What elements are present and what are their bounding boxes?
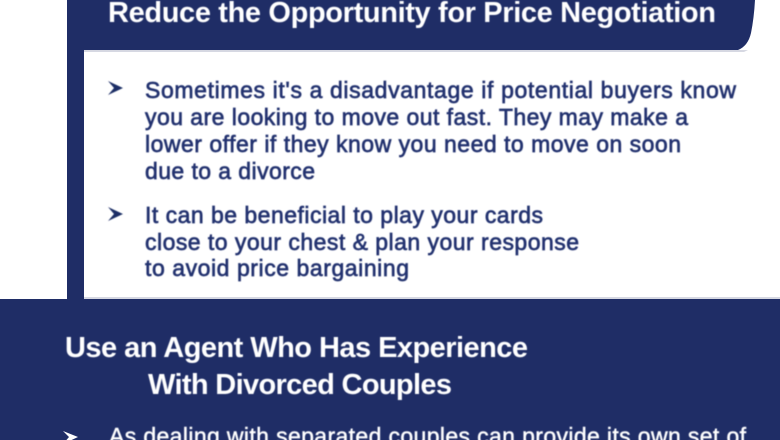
panel: price negotiation section [67, 0, 780, 299]
heading: experienced agent: With Divorced Couples [148, 369, 452, 401]
icon: arrow bullet two [108, 207, 123, 221]
icon: arrow bullet three [63, 431, 78, 440]
bullet text one: you are looking to move out fast. They may make a [145, 104, 688, 130]
bullet text one: lower offer if they know you need to move on soon [145, 131, 681, 157]
heading banner [67, 0, 755, 299]
panel: price negotiation bullet points [108, 77, 736, 281]
bullet text one: Sometimes it's a disadvantage if potential buyers know [145, 77, 736, 103]
bullet text two: It can be beneficial to play your cards [145, 202, 543, 228]
bullet text two: close to your chest & plan your response [145, 229, 579, 255]
heading: experienced agent [65, 332, 528, 401]
panel: experienced agent section [0, 299, 780, 440]
bullet text one [145, 77, 736, 184]
bullet text two [145, 202, 579, 281]
heading: experienced agent: Use an Agent Who Has Experience [65, 332, 528, 364]
section background [0, 299, 780, 440]
panel shadow [84, 50, 780, 299]
icon: arrow bullet one [108, 81, 123, 95]
bullet text one: due to a divorce [145, 158, 315, 184]
bullet text two: to avoid price bargaining [145, 255, 409, 281]
